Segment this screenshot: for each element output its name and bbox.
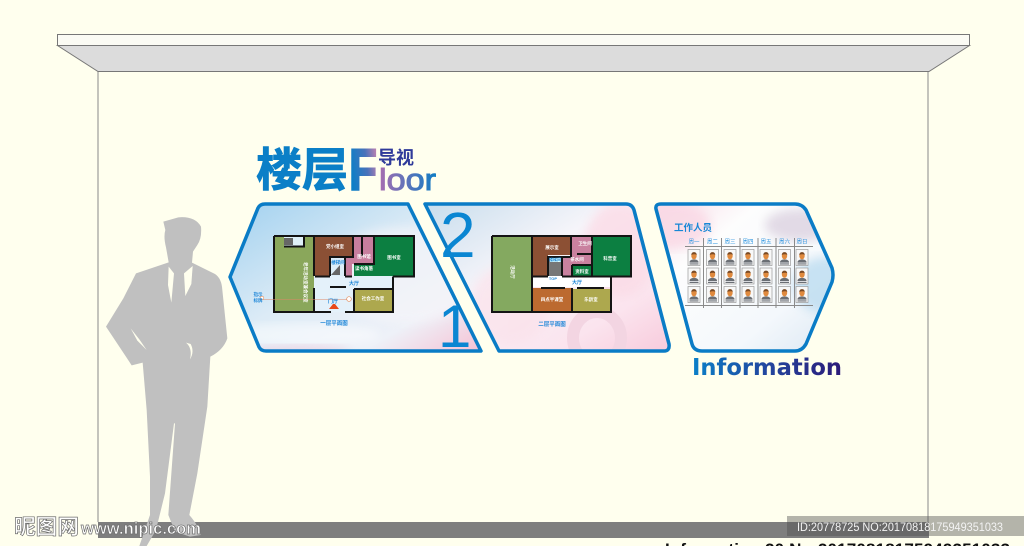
room labels: 资料室 [575,268,589,275]
blue labels: 指示 [254,291,263,298]
floor plan: first floor [254,236,414,327]
stairs [548,258,562,276]
room: green L-shape [354,237,413,276]
number 1: 1 [438,293,471,360]
room labels: 科普室 [603,255,617,262]
panel background [658,206,832,350]
blue labels: 大厅 [572,279,582,286]
room: orange [533,288,572,311]
title: Chinese characters: 楼层 [256,144,348,196]
title: small Chinese subtitle: 导视 [378,148,414,168]
room labels [509,240,617,303]
watermark: site logo: 昵图网 [14,516,79,539]
room: pink [346,237,374,276]
watermark: id box: ID:20778725 NO:20170818175949351033 [797,520,1003,534]
heading: Information: Information [692,355,842,381]
panel background [428,206,668,350]
weekday labels: 周六 [779,238,790,246]
room: brown [315,237,353,276]
room labels: 读书角落 [355,265,373,272]
room labels: 图书室 [387,254,401,261]
room: large olive hall [275,237,314,311]
guide line [262,298,349,300]
watermark: site logo: www.nipic.com [80,519,201,538]
stair room [284,237,304,246]
room labels: 茶水间 [570,256,584,263]
corridor [532,276,612,287]
weekday labels: 周四 [742,238,754,246]
blue labels: TOP [549,276,557,281]
staff photos [688,250,808,302]
blue labels: 楼梯间 [549,256,561,262]
panel border [656,204,833,351]
building wall outline with roof [58,34,970,522]
panel border [230,204,481,351]
room labels: 乐龄室 [584,296,598,303]
room labels: 图书馆 [357,253,371,260]
title: letter F: F [349,138,377,203]
blue labels: 楼梯间 [331,259,345,266]
floor plan: second floor [492,236,631,328]
weekday labels: 周二 [707,238,718,246]
blue labels [254,259,359,327]
floor plan walls [492,236,631,312]
room: olive [573,289,611,311]
room: green [593,236,630,276]
room labels [302,243,401,303]
number 2: 2 [440,199,476,271]
panel: second floor [423,202,671,353]
staff schedule grid [685,238,813,308]
title [256,138,436,203]
room: pink [563,236,592,276]
blue labels: 二层平面图 [538,321,566,328]
room: brown [533,236,571,276]
weekday labels [688,238,808,246]
panel: first floor [228,202,483,353]
panel background [232,206,478,350]
blue labels: 大厅 [349,280,359,287]
room labels: 活动厅 [509,265,516,279]
weekday labels: 周一 [688,238,700,246]
heading: staff: 工作人员 [674,222,713,234]
panel: staff information [654,202,835,353]
weekday labels: 周三 [724,238,736,246]
weekday labels: 周五 [760,238,772,246]
panel border [425,204,669,351]
weekday labels: 周日 [796,238,808,246]
room labels: 展示室 [545,244,559,251]
floor plan walls [274,236,414,312]
red entrance marker [329,304,339,309]
room labels: 四点半课堂 [541,296,564,303]
blue labels: 标牌 [254,297,263,304]
blue labels: 一层平面图 [320,320,348,327]
room: large olive [493,236,532,311]
title: loor: loor [379,162,436,197]
watermark: site logo [14,516,201,539]
room labels: 党小组室 [326,243,344,250]
room: dark green small [572,266,592,276]
blue labels: 门厅 [328,298,338,305]
room: olive small [354,289,392,311]
blue labels [538,256,582,328]
watermark: id box [787,516,1024,536]
room labels: 老年活动室兼会议室 [302,262,309,303]
silhouette of man in suit [106,217,227,546]
room labels: 社会工作室 [362,295,385,302]
open hall [314,276,393,312]
floor band [98,522,929,538]
room labels: 卫生间 [578,240,592,247]
stair hall [331,257,345,276]
